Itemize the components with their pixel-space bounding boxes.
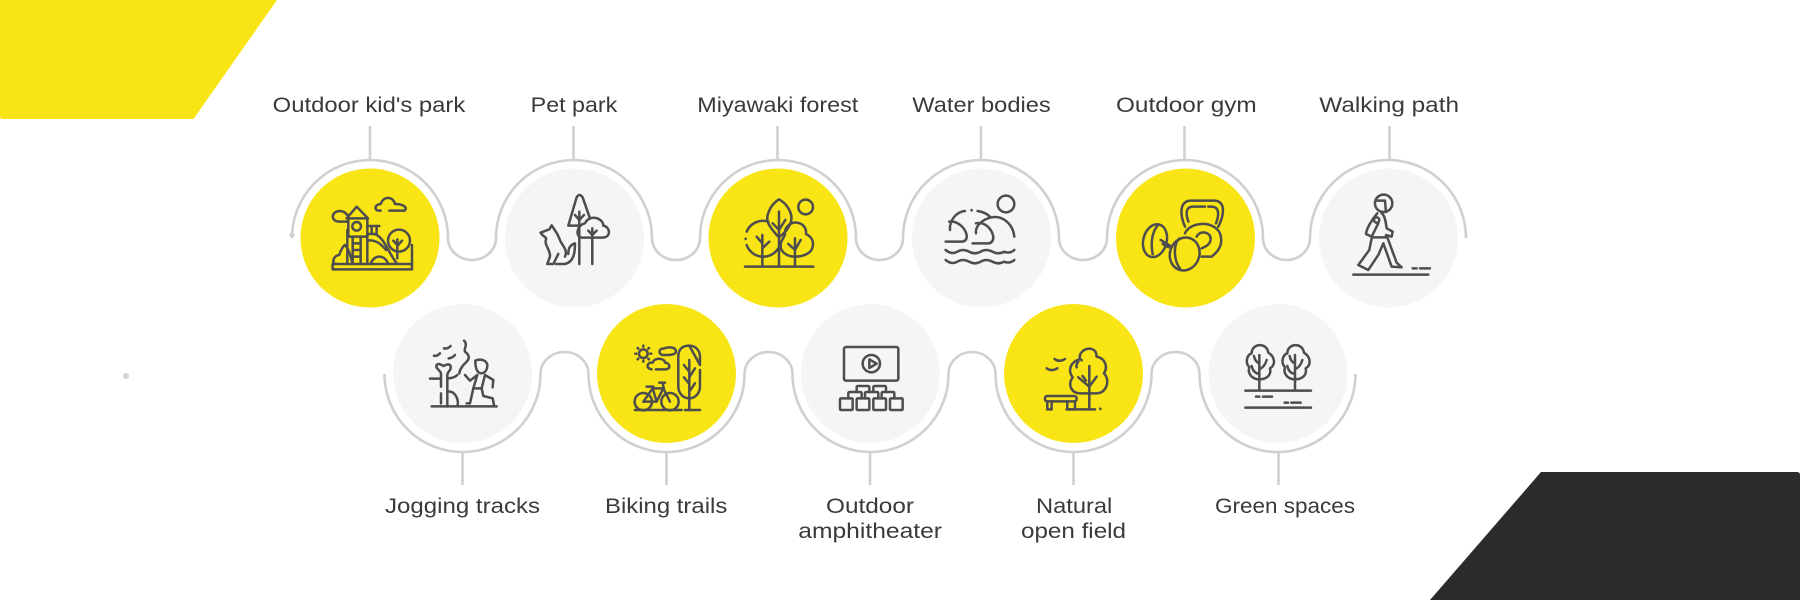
label: Outdoor kid's park [273, 94, 466, 117]
icon: two trees [1245, 345, 1311, 408]
icon: walker [1353, 195, 1430, 275]
label: Outdoor gym [1116, 94, 1257, 117]
icon: bench and tree [1045, 349, 1107, 409]
icon: bike and tree [635, 346, 700, 410]
label: Green spaces [1215, 495, 1355, 518]
icon: playground [333, 198, 412, 269]
icon: dog and trees [541, 195, 609, 264]
label: Pet park [531, 94, 618, 117]
label: Miyawaki forest [697, 94, 858, 117]
node: Outdoor kid's park [273, 94, 466, 308]
node: Walking path [1319, 94, 1459, 308]
disc [1319, 168, 1458, 308]
disc [393, 304, 532, 443]
icon: forest [745, 199, 813, 267]
top row connector line [290, 126, 1466, 260]
icon: screen and seats [840, 347, 903, 410]
node: Outdoor amphitheater [798, 304, 942, 543]
node: Water bodies [912, 94, 1051, 308]
node: Jogging tracks [385, 304, 540, 518]
yellow corner shape [0, 0, 277, 119]
icon: jogger [430, 341, 497, 406]
disc [300, 168, 440, 308]
node: Outdoor gym [1116, 94, 1257, 308]
bottom row connector line [384, 352, 1356, 485]
disc [597, 304, 736, 443]
node: Green spaces [1208, 304, 1355, 518]
node: Pet park [505, 94, 644, 308]
icon: waves and sun [946, 196, 1014, 263]
node: Natural open field [1004, 304, 1143, 543]
disc [1004, 304, 1143, 443]
disc [505, 168, 644, 308]
label: Outdoor [826, 495, 914, 518]
label: Natural [1036, 495, 1112, 518]
label: Water bodies [912, 94, 1051, 117]
label line 2: amphitheater [798, 520, 942, 543]
label: Walking path [1319, 94, 1459, 117]
dark corner shape [1430, 472, 1800, 600]
label line 2: open field [1021, 520, 1126, 543]
disc [708, 168, 848, 308]
icon: kettlebell and dumbbell [1139, 201, 1223, 275]
node: Biking trails [597, 304, 736, 518]
disc [912, 168, 1051, 308]
node: Miyawaki forest [697, 94, 858, 308]
decorative dot [123, 373, 129, 379]
disc [1116, 168, 1255, 308]
disc [801, 304, 940, 443]
label: Jogging tracks [385, 495, 540, 518]
disc [1208, 304, 1348, 443]
label: Biking trails [605, 495, 727, 518]
